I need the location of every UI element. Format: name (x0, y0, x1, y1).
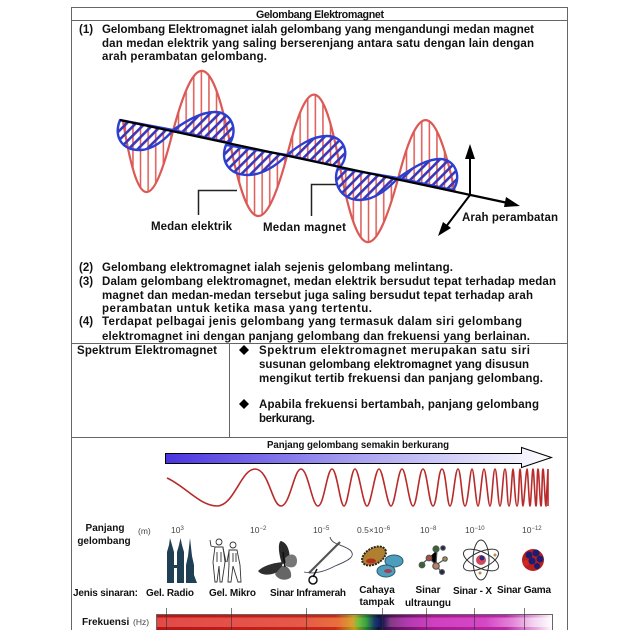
text block: spectrum bullets: susunan gelombang elektromagnet yang disusun (259, 359, 529, 371)
label: Sinar Gama: Sinar Gama (497, 585, 551, 596)
wavelength scale: −10 (474, 526, 485, 532)
icon: needle with thread (304, 537, 352, 584)
icon: bullet (239, 345, 249, 355)
wavelength scale: 10 (522, 525, 531, 535)
label: Cahaya tampak: tampak (359, 597, 395, 608)
text block: spectrum bullets: berkurang. (259, 413, 315, 425)
wavelength scale: 0.5×10 (357, 525, 383, 535)
leader: magnetic (312, 184, 336, 216)
label: Gel. Radio: Gel. Radio (146, 588, 194, 599)
label: Sinar ultraungu: Sinar (415, 585, 441, 596)
label: Medan elektrik: Medan elektrik (151, 221, 233, 233)
text block: points 2 to 4: magnet dan medan-medan tersebut juga saling bersudut tepat terhadap arah (102, 290, 533, 302)
diagram: electromagnetic wave (118, 71, 558, 242)
label: Medan magnet: Medan magnet (263, 222, 346, 234)
wavelength scale: −6 (383, 526, 391, 532)
text block: points 2 to 4: (3) (79, 276, 93, 288)
label: unit m: (m) (138, 526, 151, 536)
text block: points 2 to 4: perambatan untuk ketika masa yang tertentu. (102, 303, 372, 315)
icon: nucleus (522, 549, 544, 571)
text block: points 2 to 4: (4) (79, 316, 93, 328)
text block: spectrum bullets (239, 345, 543, 425)
wavelength scale: 3 (180, 526, 184, 532)
text block: spectrum bullets: Spektrum elektromagnet merupakan satu siri (259, 345, 530, 357)
wavelength scale: 10 (313, 525, 322, 535)
label: unit Hz: (Hz) (133, 617, 149, 627)
icon: molecule (419, 546, 447, 574)
wavelength scale: 10 (420, 525, 429, 535)
label: Cahaya tampak: Cahaya (359, 585, 395, 596)
text block: point 1: dan medan elektrik yang saling berserenjang antara satu dengan lain dengan (102, 38, 534, 50)
wavelength scale: −2 (259, 526, 267, 532)
arrow: wavelength gradient (166, 448, 552, 468)
wavelength scale: 10 (465, 525, 474, 535)
label: Frekuensi: Frekuensi (82, 617, 129, 628)
icon: human figures (210, 539, 241, 582)
label: wavelength decreasing: Panjang gelombang semakin berkurang (267, 440, 449, 451)
label: Sinar ultraungu: ultraungu (405, 598, 451, 609)
wavelength scale: −8 (429, 526, 437, 532)
text block: point 1 (79, 24, 534, 63)
icon: butterfly (258, 541, 297, 580)
text block: point 1: arah perambatan gelombang. (102, 51, 267, 63)
label: Sinar-X: Sinar - X (453, 586, 492, 597)
label: Cahaya tampak (359, 585, 395, 608)
chart: chirped wave (167, 469, 548, 506)
table borders (72, 7, 568, 630)
text block: points 2 to 4: Terdapat pelbagai jenis gelombang yang termasuk dalam siri gelombang (102, 316, 522, 328)
title: Gelombang Elektromagnet (256, 9, 384, 21)
leader: electric (198, 190, 237, 215)
chart: frequency bar (156, 608, 553, 630)
wavelength scale: −5 (322, 526, 330, 532)
text block: points 2 to 4: Dalam gelombang elektromagnet, medan elektrik bersudut tepat terhadap medan (102, 276, 556, 288)
icon: twin towers (167, 538, 197, 583)
icon: atom (460, 540, 502, 580)
icon: bullet (239, 399, 249, 409)
label: Panjang gelombang: Panjang (86, 523, 124, 534)
label: Panjang gelombang (77, 523, 131, 547)
heading: Spektrum Elektromagnet: Spektrum Elektromagnet (77, 345, 217, 357)
text block: spectrum bullets: mengikut tertib frekuensi dan panjang gelombang. (259, 373, 543, 385)
label: Sinar ultraungu (405, 585, 451, 609)
wavelength scale: 10 (171, 525, 180, 535)
text block: points 2 to 4: elektromagnet ini dengan panjang gelombang dan frekuensi yang berlainan. (102, 331, 530, 343)
label: Gel. Mikro: Gel. Mikro (209, 588, 256, 599)
icon: visible light cells (359, 543, 403, 577)
label: Panjang gelombang: gelombang (77, 536, 131, 547)
arrow: propagation axis (120, 120, 520, 207)
text block: point 1: Gelombang Elektromagnet ialah gelombang yang mengandungi medan magnet (102, 24, 534, 36)
electric field wave (123, 71, 455, 242)
label: Arah perambatan: Arah perambatan (462, 212, 558, 224)
label: Jenis sinaran: Jenis sinaran: (73, 588, 138, 599)
text block: point 1: (1) (79, 24, 93, 36)
label: Sinar Inframerah: Sinar Inframerah (270, 588, 346, 599)
wavelength scale: 10 (250, 525, 259, 535)
text block: points 2 to 4 (79, 262, 556, 343)
magnetic field wave (118, 112, 457, 200)
text block: spectrum bullets: Apabila frekuensi bertambah, panjang gelombang (259, 399, 539, 411)
text block: points 2 to 4: Gelombang elektromagnet ialah sejenis gelombang melintang. (102, 262, 453, 274)
wavelength scale: −12 (531, 526, 542, 532)
arrow: axes (438, 144, 475, 236)
text block: points 2 to 4: (2) (79, 262, 93, 274)
wavelength scale (171, 525, 542, 535)
